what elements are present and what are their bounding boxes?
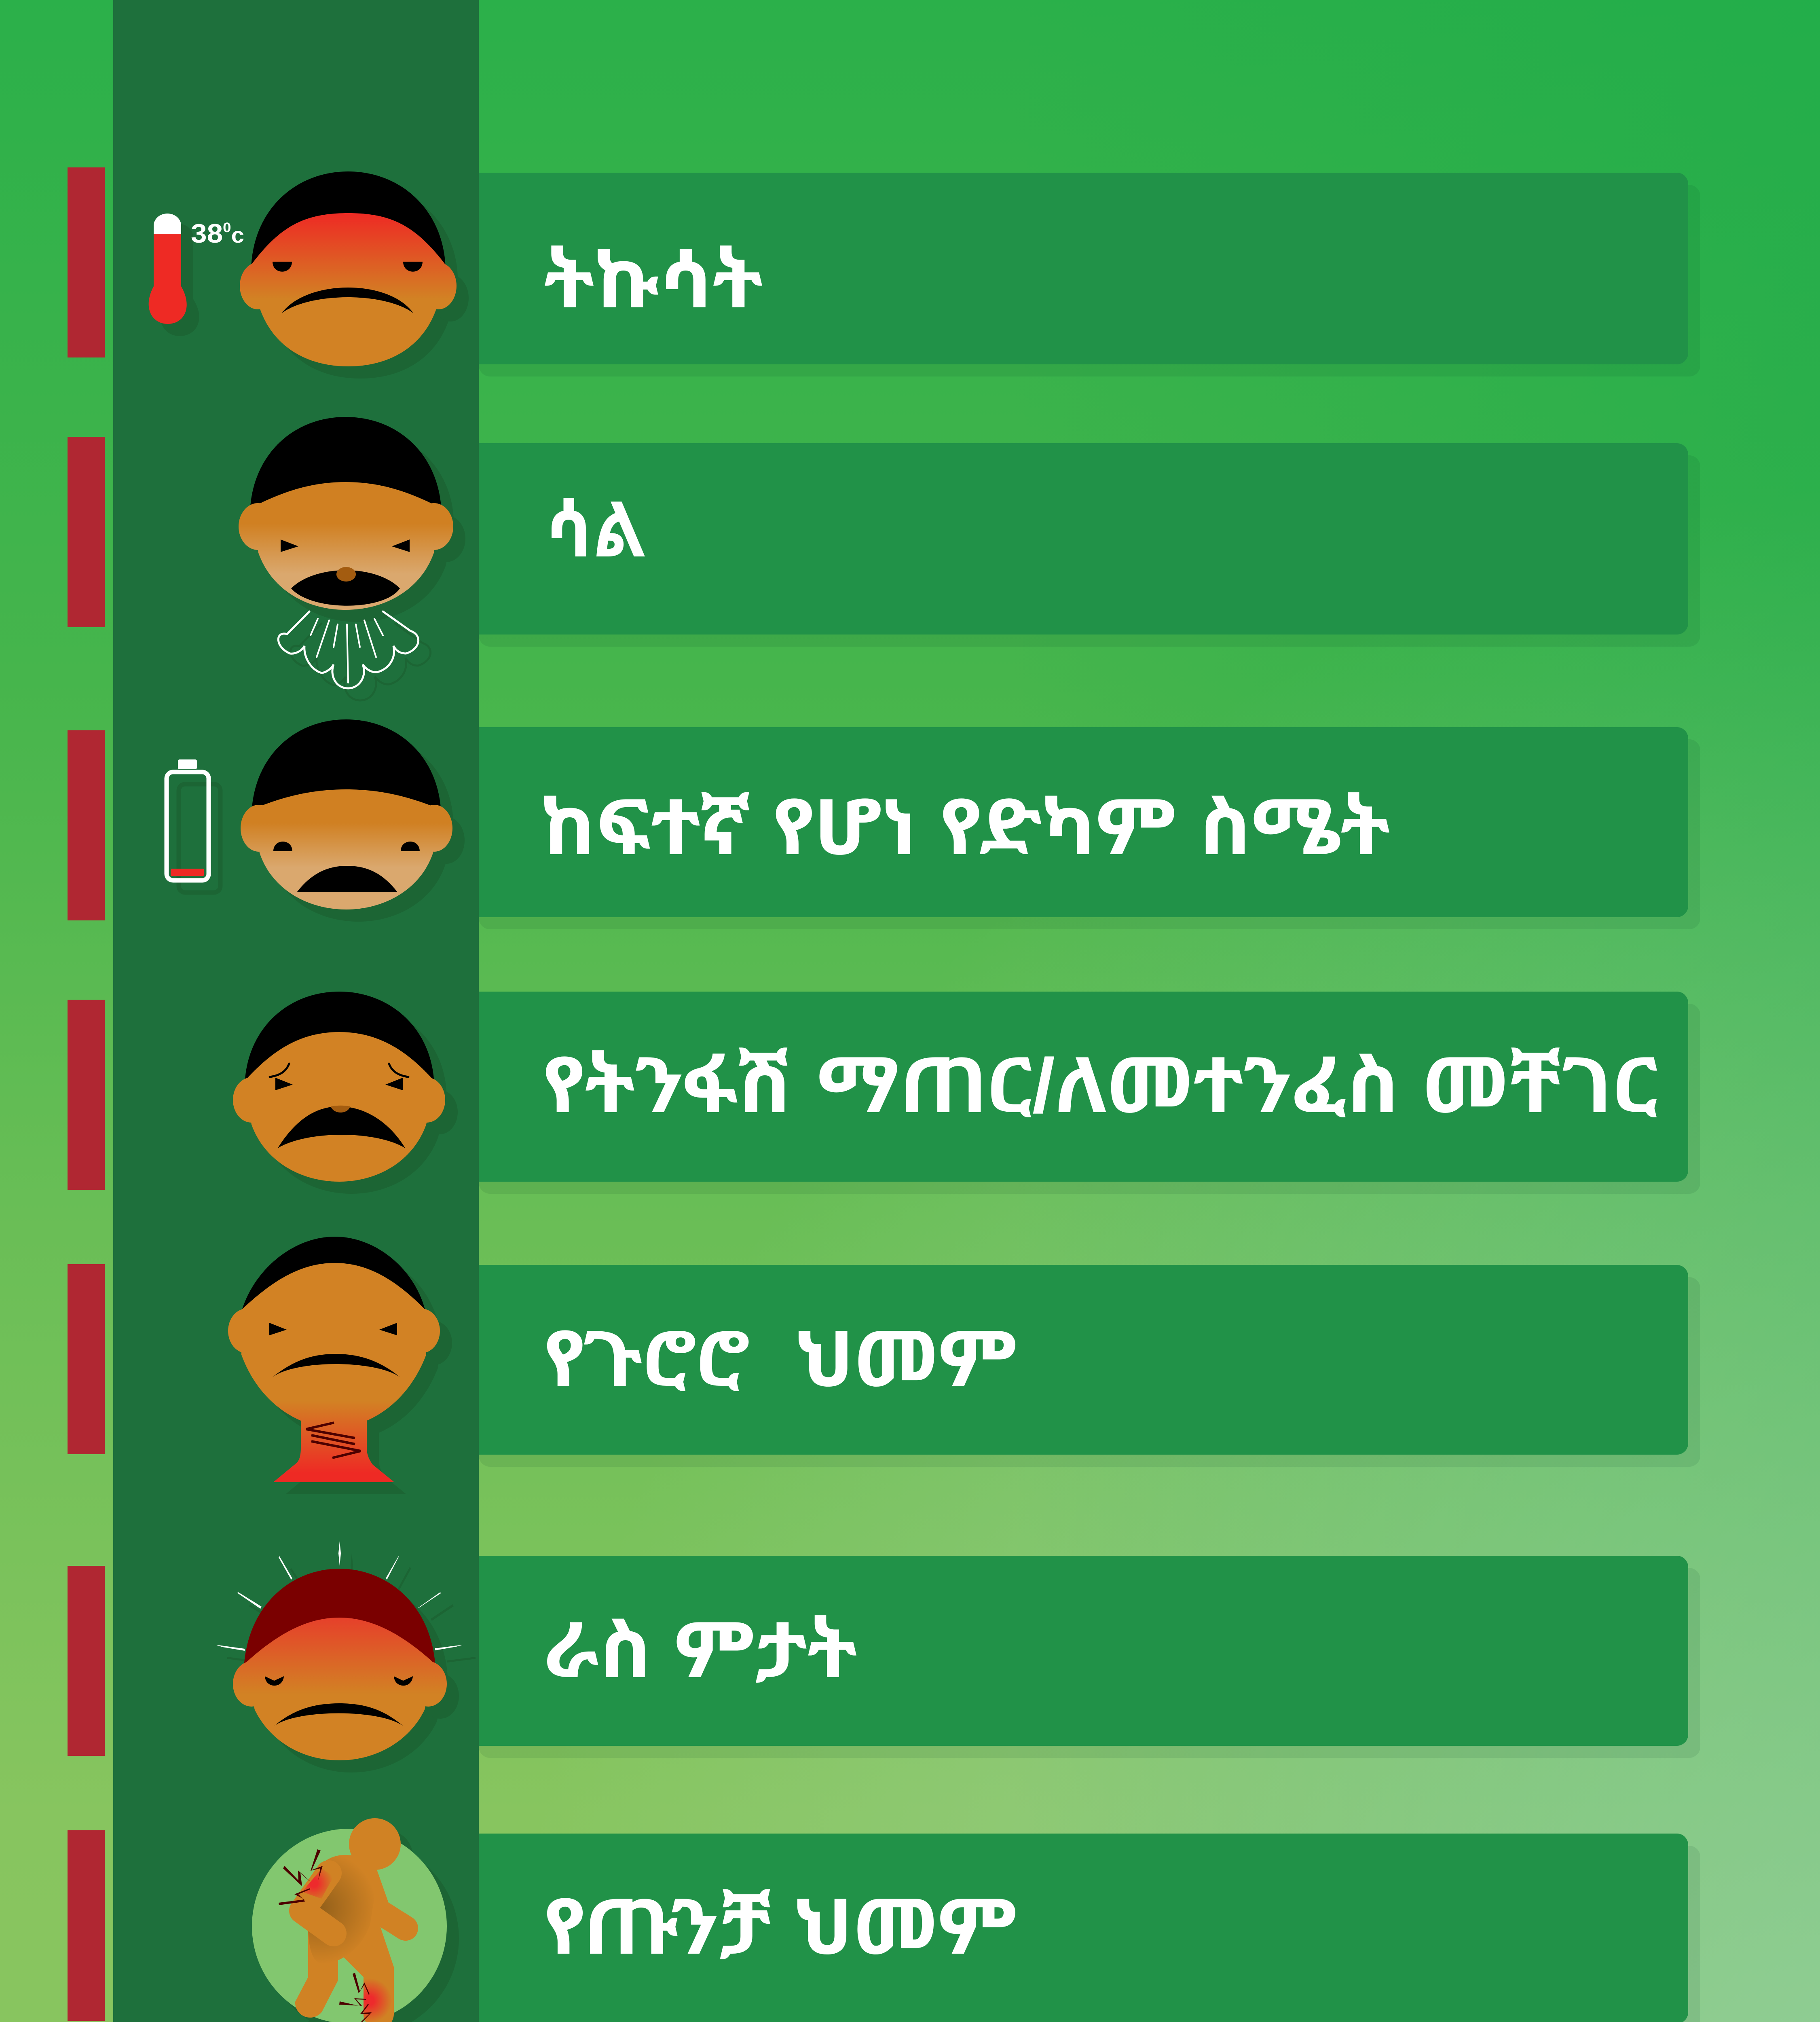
row: sore throat [479,1265,1700,1467]
row: fever: ትኩሳት [544,238,763,324]
icon: breathless face [233,992,458,1194]
icon: face coughing [239,417,465,622]
icon: cough spray [278,611,431,700]
icon: face with fever [240,171,469,379]
row: fever [479,173,1700,376]
icon: sore throat face [228,1237,452,1494]
red markers [68,167,105,2022]
row: shortness of breath [479,992,1700,1194]
row: muscle pain: የጡንቻ ህመም [544,1885,1017,1970]
icon: thermometer 38c: 0 [223,220,231,235]
icon: low battery [167,759,220,893]
row: cough [479,443,1700,647]
row: shortness of breath: የትንፋሽ ማጠር/ለመተንፈስ መቸገር [543,1043,1658,1129]
row: cough: ሳል [545,487,646,573]
row: sore throat: የጉሮሮ ህመም [544,1317,1017,1402]
row: extreme tiredness [479,727,1700,929]
row: extreme tiredness: ከፍተኛ የሆነ የድካም ስሜት [541,785,1390,871]
row: headache: ራስ ምታት [544,1608,857,1694]
left dark panel [113,0,479,2022]
icon: headache face [215,1541,476,1772]
row: muscle pain [479,1834,1700,2022]
icon: thermometer 38c: c [231,223,244,247]
icon: figure with muscle pain [252,1818,459,2022]
icon: thermometer 38c: 38 [191,218,220,248]
icon: tired face [241,719,465,922]
row: headache [479,1556,1700,1758]
icon: thermometer 38c [149,214,244,336]
